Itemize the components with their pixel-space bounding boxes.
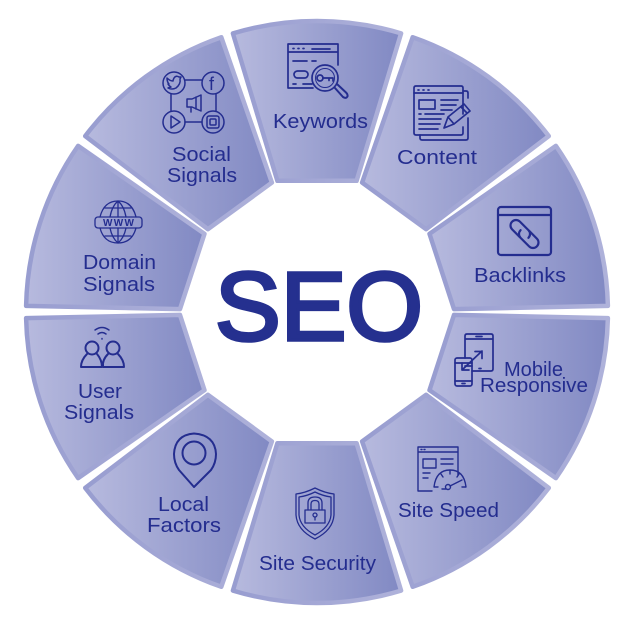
panel: domain signals [26,146,204,309]
icon: social network [163,72,224,133]
label: responsive: Responsive [480,375,588,397]
segment: social signals [85,37,272,229]
label: content: Content [397,147,477,169]
label: site security: Site Security [259,553,376,575]
label: social: Social [172,144,231,166]
label: keywords: Keywords [273,111,368,133]
segment: local factors [85,395,272,587]
icon: social network: f [209,74,215,94]
panel: keywords [233,21,401,181]
panel: local factors [85,395,272,587]
label: factors: Factors [147,515,221,537]
icon: two users with wifi [81,328,124,367]
segment: mobile responsive [430,315,608,478]
label: signals: Signals [167,165,237,187]
segment: domain signals [26,146,204,309]
icon: link in browser window [498,207,551,255]
segment: keywords [233,21,401,181]
panel: backlinks [430,146,608,309]
icon: www globe [95,201,142,243]
label: signals: Signals [83,274,155,296]
panel: content [362,37,549,229]
segment: user signals [26,315,204,478]
panel: mobile responsive [430,315,608,478]
icon: tablet and phone with arrow [455,334,493,386]
panel: user signals [26,315,204,478]
title: SEO: SEO [215,252,423,361]
label: local: Local [158,494,209,516]
icon: content pages and pencil [414,86,470,140]
segment: site speed [362,395,549,587]
segment: backlinks [430,146,608,309]
segment: site security [233,443,401,603]
panel: social signals [85,37,272,229]
label: signals: Signals [64,402,134,424]
icon: location pin [174,434,216,487]
label: mobile: Mobile [504,359,563,381]
icon: speed gauge window [418,447,466,491]
icon: www globe: WWW [103,218,135,229]
label: site speed: Site Speed [398,500,499,522]
label: user: User [78,381,122,403]
segment: content [362,37,549,229]
icon: keyword search window [288,44,348,98]
panel: site speed [362,395,549,587]
label: backlinks: Backlinks [474,265,566,287]
label: domain: Domain [83,252,156,274]
panel: site security [233,443,401,603]
icon: shield with padlock [296,488,334,539]
